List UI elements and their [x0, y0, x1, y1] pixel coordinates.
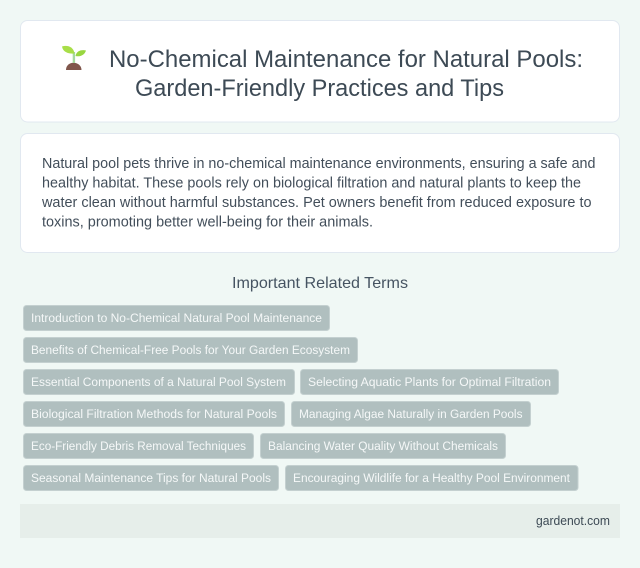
chip [24, 338, 358, 362]
paragraph text: Natural pool pets thrive in no-chemical maintenance environments, ensuring a safe and [42, 156, 596, 172]
footer [20, 504, 620, 538]
panel: title card [20, 20, 620, 122]
chip: Balancing Water Quality Without Chemicals [268, 439, 498, 453]
chip: Eco-Friendly Debris Removal Techniques [31, 439, 246, 453]
paragraph text: water clean without harmful substances. Pet owners benefit from reduced exposure to [41, 195, 592, 211]
chip [24, 370, 294, 394]
paragraph text [41, 156, 596, 230]
chip: Biological Filtration Methods for Natural Pools [31, 407, 277, 421]
heading: related terms: Important Related Terms [232, 275, 408, 292]
chip: Encouraging Wildlife for a Healthy Pool Environment [293, 471, 571, 485]
chip [292, 402, 530, 426]
chip [260, 434, 506, 458]
paragraph text: healthy habitat. These pools rely on biological filtration and natural plants to keep the [42, 176, 581, 192]
paragraph text: toxins, promoting better well-being for their animals. [42, 214, 373, 230]
chip: Managing Algae Naturally in Garden Pools [299, 407, 522, 421]
chip: Selecting Aquatic Plants for Optimal Filtration [308, 375, 551, 389]
chip [24, 466, 278, 490]
chip: Seasonal Maintenance Tips for Natural Pools [31, 471, 271, 485]
chip: Essential Components of a Natural Pool System [31, 375, 286, 389]
title text: No-Chemical Maintenance for Natural Pools: [109, 46, 583, 73]
footer source text: gardenot.com [536, 514, 610, 528]
related terms chips [24, 306, 578, 490]
title text [109, 46, 583, 102]
chip [286, 466, 578, 490]
chip: Benefits of Chemical-Free Pools for Your Garden Ecosystem [31, 343, 350, 357]
icon: sprout [62, 46, 86, 70]
chip: Introduction to No-Chemical Natural Pool Maintenance [31, 311, 322, 325]
title text: Garden-Friendly Practices and Tips [135, 75, 504, 102]
chip [300, 370, 558, 394]
chip [24, 434, 254, 458]
panel: intro paragraph [20, 134, 620, 252]
chip [24, 402, 284, 426]
chip [24, 306, 330, 330]
